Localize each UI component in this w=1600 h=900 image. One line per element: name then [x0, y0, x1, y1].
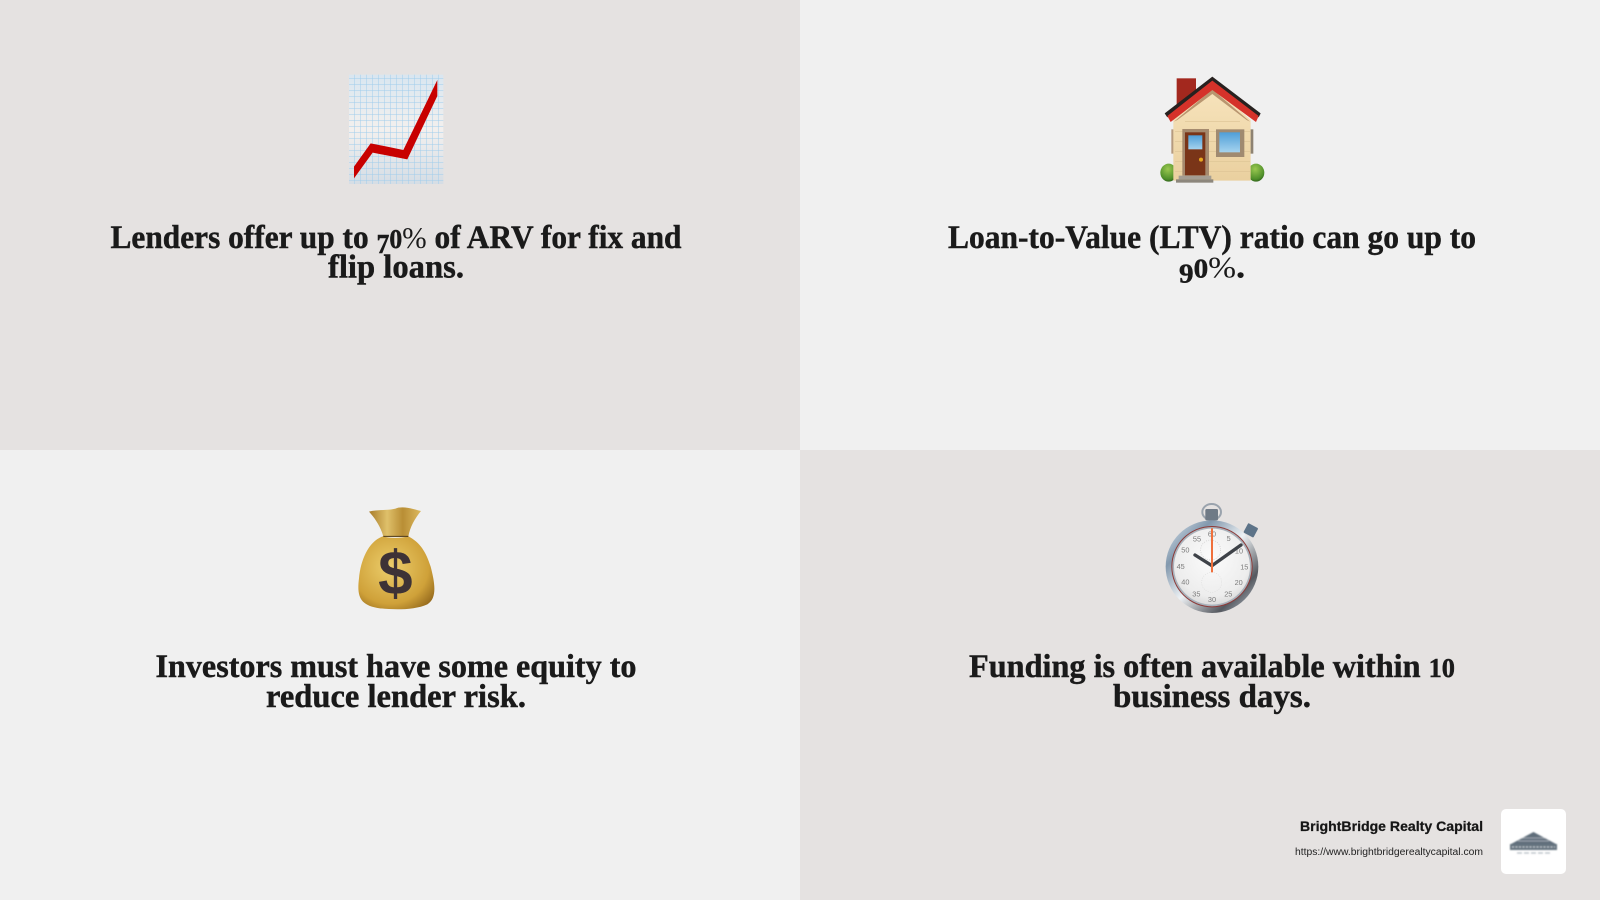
- icon: money bag: $: [378, 539, 413, 608]
- heading: LTV ratio up to 90%: 9: [1179, 258, 1194, 288]
- heading: funding within 10 business days: [969, 649, 1455, 715]
- company name: BrightBridge Realty Capital: [1300, 818, 1483, 834]
- panel: 70% of ARV: [0, 0, 800, 450]
- icon: stopwatch: [1166, 504, 1258, 613]
- heading: investors must have equity: reduce lender risk.: [266, 679, 526, 715]
- icon: stopwatch: 20: [1235, 578, 1243, 587]
- icon: stopwatch: 15: [1240, 562, 1248, 571]
- icon: stopwatch: 60: [1208, 529, 1216, 538]
- icon: stopwatch: 40: [1181, 578, 1189, 587]
- icon: stopwatch: 25: [1224, 590, 1232, 599]
- heading: lenders offer up to 70% of ARV: [110, 220, 682, 286]
- logo card: [1501, 809, 1566, 874]
- heading: lenders offer up to 70% of ARV: Lenders offer up to: [110, 220, 382, 256]
- heading: funding within 10 business days: Funding is often available within 10: [969, 649, 1455, 685]
- heading: LTV ratio up to 90%: 0: [1194, 254, 1208, 284]
- heading: investors must have equity: [156, 649, 636, 715]
- heading: funding within 10 business days: business days.: [1113, 679, 1311, 715]
- icon: chart with upward trend: [349, 75, 443, 184]
- heading: investors must have equity: Investors must have some equity to: [156, 649, 636, 685]
- panel: funding speed: [800, 450, 1600, 900]
- heading: LTV ratio up to 90%: %.: [1208, 250, 1244, 286]
- heading: LTV ratio up to 90%: [948, 220, 1476, 288]
- icon: stopwatch: 55: [1193, 534, 1201, 543]
- icon: stopwatch: 5: [1227, 534, 1231, 543]
- icon: stopwatch: 35: [1192, 590, 1200, 599]
- heading: lenders offer up to 70% of ARV: 0: [389, 224, 402, 254]
- heading: lenders offer up to 70% of ARV: % of ARV for fix and: [402, 220, 695, 256]
- heading: lenders offer up to 70% of ARV: 7: [377, 229, 389, 259]
- icon: stopwatch: 50: [1181, 546, 1189, 555]
- panel: LTV ratio: [800, 0, 1600, 450]
- icon: stopwatch: 30: [1208, 595, 1216, 604]
- heading: LTV ratio up to 90%: Loan-to-Value (LTV) ratio can go up to: [948, 220, 1476, 256]
- icon: stopwatch: 45: [1177, 562, 1185, 571]
- panel: investor equity: [0, 450, 800, 900]
- icon: house: [1160, 77, 1264, 183]
- brand footer: [1295, 809, 1566, 874]
- icon: stopwatch: 10: [1235, 547, 1243, 556]
- company URL: https://www.brightbridgerealtycapital.com: [1295, 847, 1483, 858]
- icon: money bag: [358, 507, 434, 609]
- heading: lenders offer up to 70% of ARV: flip loans.: [328, 250, 464, 286]
